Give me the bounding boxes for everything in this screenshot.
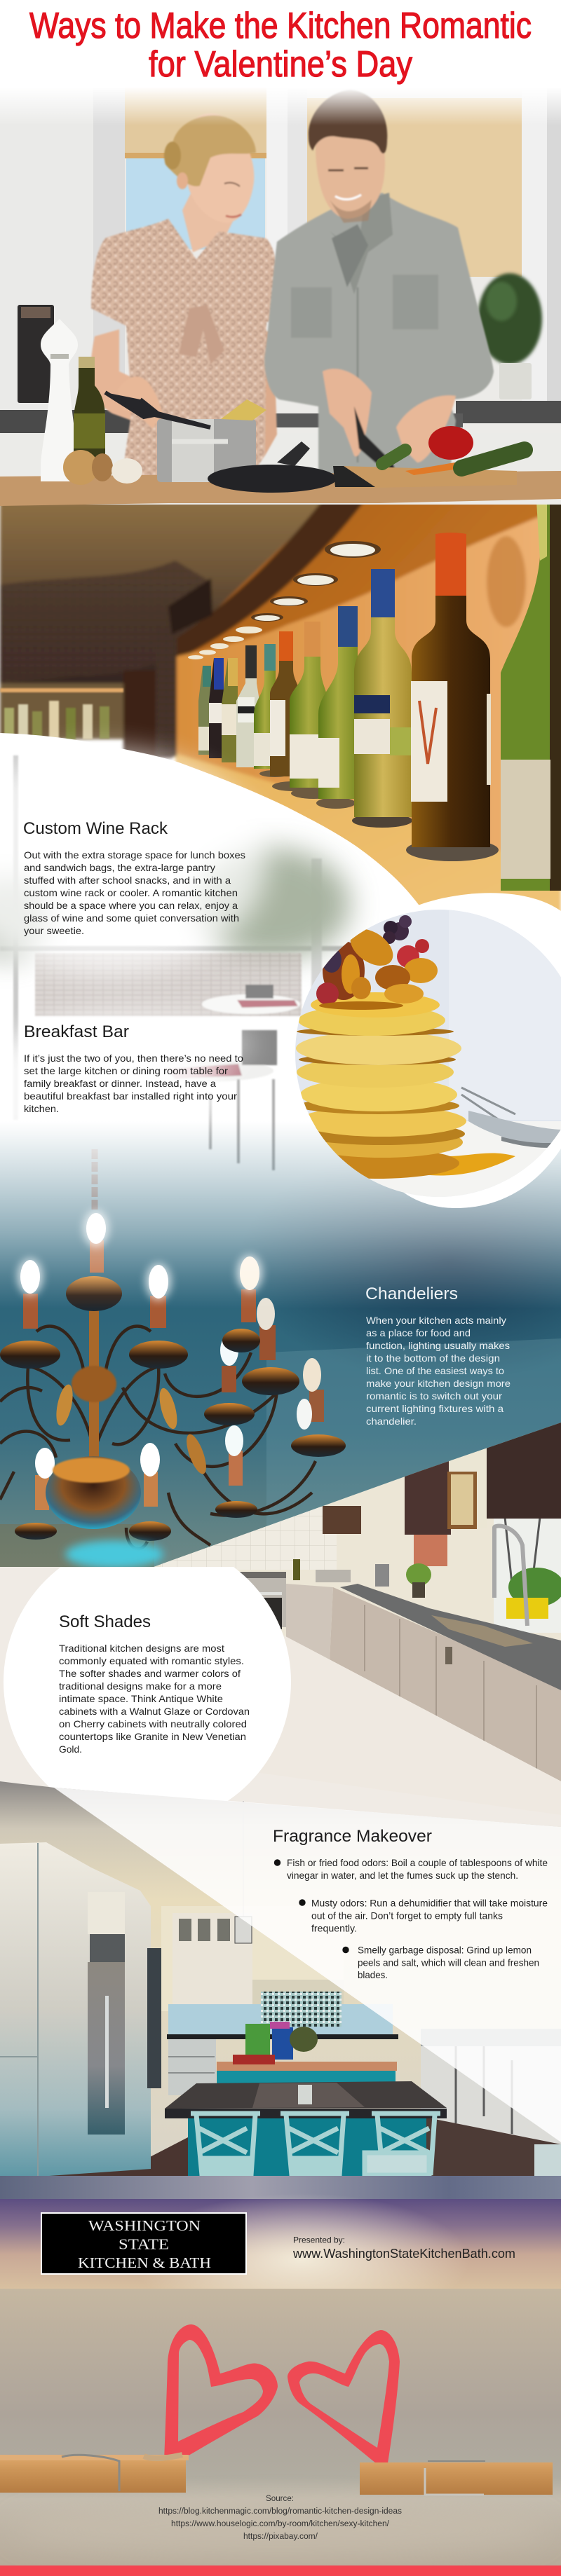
custom wine rack text: your sweetie. <box>24 925 84 936</box>
translucent overlay: fragrance <box>54 1788 561 2142</box>
chandeliers text: as a place for food and <box>366 1327 471 1338</box>
dining table <box>165 2081 447 2176</box>
bullet: musty odors: frequently. <box>311 1923 357 1934</box>
chandeliers text: current lighting fixtures with a <box>366 1403 503 1414</box>
light discs <box>188 541 381 659</box>
left clothespin <box>0 2455 189 2493</box>
custom wine rack text: custom wine rack or cooler. A romantic kitchen <box>24 887 238 898</box>
logo: STATE <box>119 2235 169 2252</box>
logo <box>41 2213 246 2274</box>
distant bottles <box>0 690 123 739</box>
logo: WASHINGTON <box>88 2217 201 2234</box>
soft shades text: on Cherry cabinets with neutrally colored <box>59 1718 247 1729</box>
soft shades text: countertops like Granite in New Venetian <box>59 1731 246 1742</box>
footer banner <box>0 2193 561 2327</box>
soft shades text: traditional designs make for a more <box>59 1680 222 1692</box>
chandeliers text <box>365 1284 511 1427</box>
photo: white kitchen with counters <box>140 1416 561 1787</box>
fragrance makeover text <box>273 1827 548 1980</box>
breakfast bar text: If it’s just the two of you, then there’s no need to <box>24 1053 243 1064</box>
soft shades text: intimate space. Think Antique White <box>59 1693 223 1704</box>
custom wine rack text: stuffed with after school snacks, and in with a <box>24 875 231 886</box>
kitchen island <box>217 2062 397 2085</box>
soft shades text <box>59 1612 250 1755</box>
spoon and fork <box>461 1088 561 1149</box>
woman <box>90 114 279 484</box>
chandeliers text: When your kitchen acts mainly <box>366 1315 506 1326</box>
bullet: garbage disposal: blades. <box>358 1969 388 1980</box>
fruit and nut topping <box>316 915 438 1010</box>
man <box>264 90 494 484</box>
chandeliers text: make your kitchen design more <box>366 1378 511 1389</box>
chandeliers text: it to the bottom of the design <box>366 1352 500 1364</box>
bullet: musty odors <box>299 1898 548 1934</box>
bullet: musty odors: out of the air. Don’t forget to empty full tanks <box>311 1910 503 1921</box>
windows and blinds <box>405 1416 561 1633</box>
custom wine rack text <box>23 819 245 936</box>
bullet: fish odors: vinegar in water, and let the fumes suck up the stench. <box>287 1870 518 1881</box>
custom wine rack text: Out with the extra storage space for lunch boxes <box>24 849 245 861</box>
custom wine rack text: should be a space where you can relax, enjoy a <box>24 900 238 911</box>
right clothespin <box>360 2461 553 2495</box>
back wall units <box>161 1906 398 2095</box>
cereal boxes and flowers <box>233 2022 318 2064</box>
plant <box>478 273 542 399</box>
custom wine rack text: and sandwich bags, the extra-large pantry <box>24 862 215 873</box>
breakfast bar text: set the large kitchen or dining room table for <box>24 1065 228 1076</box>
bottom red bar <box>0 2565 561 2576</box>
soft shades text: Gold. <box>59 1743 82 1755</box>
soft shades text: Traditional kitchen designs are most <box>59 1643 224 1654</box>
breakfast bar text: Breakfast Bar <box>24 1022 129 1041</box>
jars and plants on counter <box>293 1559 431 1598</box>
photo: faded photo floor <box>154 1567 561 1815</box>
soft shades text: Soft Shades <box>59 1612 151 1631</box>
wall shelf frame <box>323 1506 361 1534</box>
chain <box>91 1149 98 1210</box>
bullet: garbage disposal: Smelly garbage disposal: Grind up lemon <box>358 1944 532 1955</box>
source credits: https://www.houselogic.com/by-room/kitchen/sexy-kitchen/ <box>171 2520 390 2528</box>
presented by: www.WashingtonStateKitchenBath.com <box>292 2247 515 2261</box>
faded cafe photo <box>0 755 351 1170</box>
brass arms <box>0 1326 316 1549</box>
bullet: garbage disposal <box>342 1944 539 1980</box>
source credits <box>158 2495 402 2541</box>
syrup pool <box>428 1153 515 1176</box>
bullet: musty odors: Musty odors: Run a dehumidifier that will take moisture <box>311 1898 548 1909</box>
central stem <box>53 1303 210 1477</box>
heart right <box>288 2330 400 2463</box>
central globe <box>46 1456 163 1568</box>
presented by: Presented by: <box>293 2235 345 2245</box>
soft shades text: The softer shades and warmer colors of <box>59 1668 241 1679</box>
panel: pancake photo circle <box>291 893 561 1208</box>
breakfast bar text: beautiful breakfast bar installed right into your <box>24 1090 237 1102</box>
wooden counter <box>0 471 561 506</box>
three dining chairs <box>191 2113 440 2175</box>
onions and garlic <box>63 450 142 485</box>
counter and cabinets <box>0 305 561 475</box>
pancake stack <box>291 992 466 1179</box>
window: blinds and sky <box>125 84 561 420</box>
custom wine rack text: Custom Wine Rack <box>23 819 168 838</box>
title: for Valentine’s Day <box>149 44 412 85</box>
frying pan <box>208 441 337 493</box>
chandeliers text: chandelier. <box>366 1416 417 1427</box>
cabinets and worktop <box>286 1584 561 1781</box>
right side cabinets under overlay <box>421 2029 561 2151</box>
source credits: Source: <box>266 2495 294 2503</box>
chandeliers text: list. One of the easiest ways to <box>366 1365 504 1376</box>
olive oil bottle <box>74 357 105 460</box>
photo: hearts <box>0 2289 561 2565</box>
breakfast bar text: kitchen. <box>24 1103 59 1114</box>
panel: custom wine rack and breakfast bar backdrop <box>0 733 449 1233</box>
title <box>29 6 532 85</box>
chandeliers text: Chandeliers <box>365 1284 458 1303</box>
photo: wine rack alcove <box>0 498 561 925</box>
soft shades text: cabinets with a Walnut Glaze or Cordovan <box>59 1706 250 1717</box>
custom wine rack text: glass of wine and some quiet conversation with <box>24 912 239 924</box>
heart left <box>164 2324 278 2461</box>
soft shades text: commonly equated with romantic styles. <box>59 1655 244 1666</box>
presented by <box>292 2235 515 2261</box>
bullet: fish odors: Fish or fried food odors: Boil a couple of tablespoons of white <box>287 1857 548 1868</box>
cooking pot <box>105 392 266 482</box>
cutting board with vegetables <box>333 426 525 488</box>
pepper mill <box>41 319 78 481</box>
source credits: https://pixabay.com/ <box>243 2533 318 2541</box>
panel: soft shades circle <box>4 1538 291 1825</box>
fragrance makeover text: Fragrance Makeover <box>273 1827 432 1846</box>
pendant lamp <box>235 1801 252 1943</box>
source credits: https://blog.kitchenmagic.com/blog/romantic-kitchen-design-ideas <box>158 2507 402 2516</box>
bullet: garbage disposal: peels and salt, which will clean and freshen <box>358 1957 539 1968</box>
stove <box>201 1572 286 1629</box>
wine bottles <box>198 501 561 891</box>
candle dishes <box>0 1276 346 1541</box>
photo: couple cooking <box>0 84 561 506</box>
candles and bulbs <box>18 1210 324 1510</box>
chandeliers text: function, lighting usually makes <box>366 1340 510 1351</box>
floor <box>42 2116 561 2176</box>
breakfast bar text: family breakfast or dinner. Instead, have a <box>24 1078 216 1089</box>
photo: teal island kitchen <box>0 1781 561 2176</box>
title background fade <box>0 0 561 125</box>
photo: chandelier <box>0 1121 561 1570</box>
chandeliers text: romantic is to switch out your <box>366 1390 502 1402</box>
logo: KITCHEN & BATH <box>78 2254 211 2271</box>
breakfast bar text <box>24 1022 243 1114</box>
left tall cabinets <box>0 1842 161 2176</box>
pale floor behind soft shades <box>0 1567 561 1836</box>
bullet: fish odors <box>274 1857 548 1881</box>
footer band <box>0 2176 561 2199</box>
